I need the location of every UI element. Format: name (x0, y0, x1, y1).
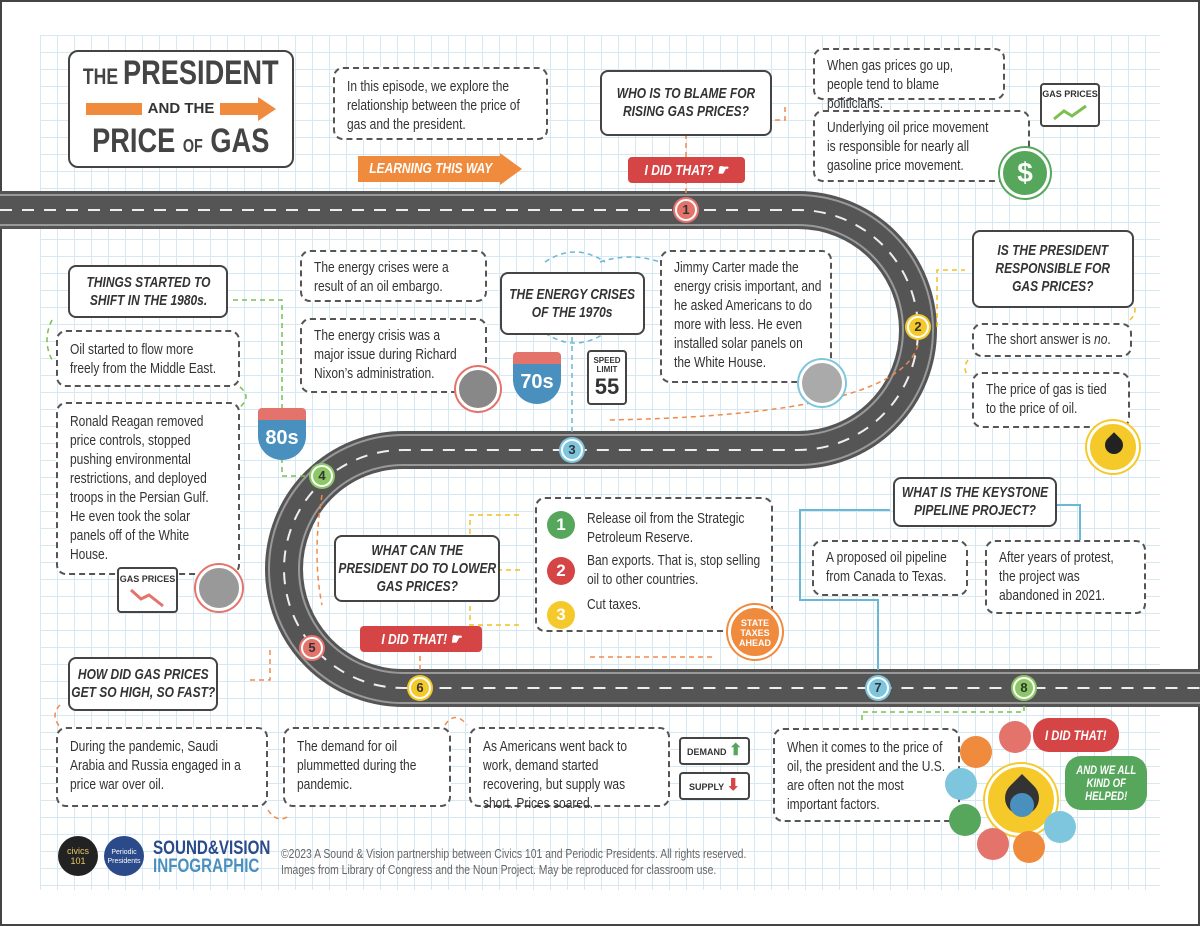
icon: dollar (1000, 148, 1050, 198)
learning this way arrow (358, 153, 522, 185)
footer logos: Periodic (111, 849, 137, 856)
footer text: ©2023 A Sound & Vision partnership between Civics 101 and Periodic Presidents. All rights reserved. (281, 846, 746, 861)
text: Jimmy Carter made the energy crisis important, and he asked Americans to do more with less. He even installed solar panels on the White House. (674, 259, 821, 371)
icon: 80s shield: 80s (265, 427, 299, 449)
footer logos: INFOGRAPHIC (153, 856, 259, 877)
what can president do: WHAT CAN THE (371, 542, 463, 558)
footer logos: 101 (70, 856, 86, 866)
what can president do: GAS PRICES? (376, 578, 458, 594)
title: PRICE OF GAS (92, 122, 270, 160)
text: 1 (682, 202, 690, 217)
speed limit sign: SPEED (593, 356, 621, 365)
text: 4 (318, 468, 326, 483)
icon: 70s shield: 70s (520, 371, 554, 393)
who is to blame: RISING GAS PRICES? (623, 103, 749, 120)
text: Release oil from the Strategic Petroleum Reserve. (587, 510, 744, 546)
demand up: DEMAND ⬆ (687, 742, 742, 759)
text: The price of gas is tied to the price of oil. (986, 381, 1107, 417)
conclusion: When it comes to the price of oil, the president and the U.S. are often not the most important factors. (787, 739, 945, 813)
text: As Americans went back to work, demand started recovering, but supply was short. Prices soared. (483, 738, 627, 812)
blame answers (813, 48, 1005, 100)
text: 6 (416, 680, 424, 695)
icon: gas prices down (117, 567, 178, 613)
speed limit sign: LIMIT (597, 365, 617, 374)
markers (299, 197, 1144, 701)
text: Cut taxes. (587, 596, 641, 613)
president responsible: RESPONSIBLE FOR (996, 260, 1110, 277)
text: I DID THAT! ☛ (381, 631, 461, 648)
speech: and we all kind of helped: AND WE ALL (1076, 763, 1136, 777)
text: 3 (556, 605, 566, 624)
president responsible (972, 230, 1134, 308)
1980s: THINGS STARTED TO (86, 274, 210, 290)
who is to blame (600, 70, 772, 136)
speech: I did that: I DID THAT! (1045, 727, 1107, 743)
icon: gas prices down: GAS PRICES (120, 574, 175, 584)
1980s (68, 265, 228, 318)
1980s: SHIFT IN THE 1980s. (89, 292, 207, 308)
text: 7 (874, 680, 882, 695)
energy crises: The energy crises were a result of an oil embargo. (314, 259, 449, 295)
icon: gas prices up: GAS PRICES (1042, 89, 1098, 99)
text: OF THE 1970s (532, 304, 613, 320)
photo: Carter (799, 360, 845, 406)
icon: 80s shield (258, 408, 306, 460)
title: THE PRESIDENT (83, 54, 279, 92)
blame answers: When gas prices go up, people tend to blame politicians. (827, 57, 953, 112)
icon: state taxes ahead: STATE (741, 618, 769, 628)
what can president do: PRESIDENT DO TO LOWER (338, 560, 496, 576)
speed limit sign (587, 350, 627, 405)
I did that? (628, 157, 745, 183)
intro text: In this episode, we explore the relationship between the price of gas and the president. (347, 78, 520, 133)
text: Oil started to flow more freely from the Middle East. (70, 341, 216, 377)
footer logos: Presidents (107, 858, 141, 865)
president responsible: GAS PRICES? (1012, 278, 1094, 295)
keystone: WHAT IS THE KEYSTONE (902, 484, 1048, 501)
text: 2 (914, 319, 922, 334)
speech: and we all kind of helped: KIND OF (1086, 776, 1126, 790)
who is to blame: WHO IS TO BLAME FOR (617, 85, 755, 102)
icon: state taxes ahead (728, 605, 782, 659)
title: AND THE (148, 100, 214, 116)
speech: I did that (1033, 718, 1119, 752)
text: After years of protest, the project was abandoned in 2021. (999, 549, 1114, 604)
photo: Reagan (196, 565, 242, 611)
icon: 70s shield (513, 352, 561, 404)
text: During the pandemic, Saudi Arabia and Russia engaged in a price war over oil. (70, 738, 241, 793)
icon: state taxes ahead: AHEAD (739, 638, 771, 648)
conclusion (773, 728, 960, 822)
icon: state taxes ahead: TAXES (740, 628, 770, 638)
how did gas prices get so high: GET SO HIGH, SO FAST? (71, 684, 215, 701)
text: Ronald Reagan removed price controls, stopped pushing environmental restrictions, and deployed troops in the Persian Gulf. He even took the solar panels off of the White House. (70, 413, 209, 563)
supply down (679, 772, 750, 800)
supply down: SUPPLY ⬇ (689, 777, 740, 794)
text: 5 (308, 640, 316, 655)
president responsible: IS THE PRESIDENT (998, 242, 1108, 259)
footer logos: civics (67, 846, 89, 856)
intro text (333, 67, 548, 140)
text: 3 (568, 442, 576, 457)
title (68, 50, 294, 168)
photo: Nixon (456, 367, 500, 411)
icon: oil drop (1087, 421, 1139, 473)
text: THE ENERGY CRISES (510, 286, 635, 302)
what can president do (334, 535, 500, 602)
I did that?: I DID THAT? ☛ (645, 162, 728, 179)
how did gas prices get so high: HOW DID GAS PRICES (78, 666, 208, 683)
footer text (281, 846, 746, 877)
text: A proposed oil pipeline from Canada to Texas. (826, 549, 947, 585)
footer logos: SOUND&VISION (153, 838, 270, 859)
speed limit sign: 55 (595, 374, 619, 399)
energy crises (300, 250, 487, 302)
learning this way arrow: LEARNING THIS WAY (369, 160, 492, 177)
cluster (945, 718, 1147, 863)
speech: and we all kind of helped (1065, 756, 1147, 810)
text: The energy crisis was a major issue during Richard Nixon’s administration. (314, 327, 457, 382)
how did gas prices get so high (68, 657, 218, 711)
text: The short answer is no. (986, 331, 1111, 348)
icon: gas prices up (1040, 83, 1100, 127)
text: 2 (556, 561, 566, 580)
keystone (893, 477, 1057, 527)
footer logos (58, 836, 270, 877)
text: Underlying oil price movement is responsible for nearly all gasoline price movement. (827, 119, 988, 174)
text: The demand for oil plummetted during the pandemic. (297, 738, 416, 793)
text: 1 (556, 515, 566, 534)
speech: and we all kind of helped: HELPED! (1085, 789, 1127, 803)
keystone: PIPELINE PROJECT? (914, 502, 1036, 519)
footer text: Images from Library of Congress and the Noun Project. May be reproduced for classroom use. (281, 862, 716, 877)
text: Ban exports. That is, stop selling oil to other countries. (587, 552, 760, 588)
demand up (679, 737, 750, 765)
text: 8 (1020, 680, 1028, 695)
icon: dollar: $ (1017, 157, 1033, 188)
